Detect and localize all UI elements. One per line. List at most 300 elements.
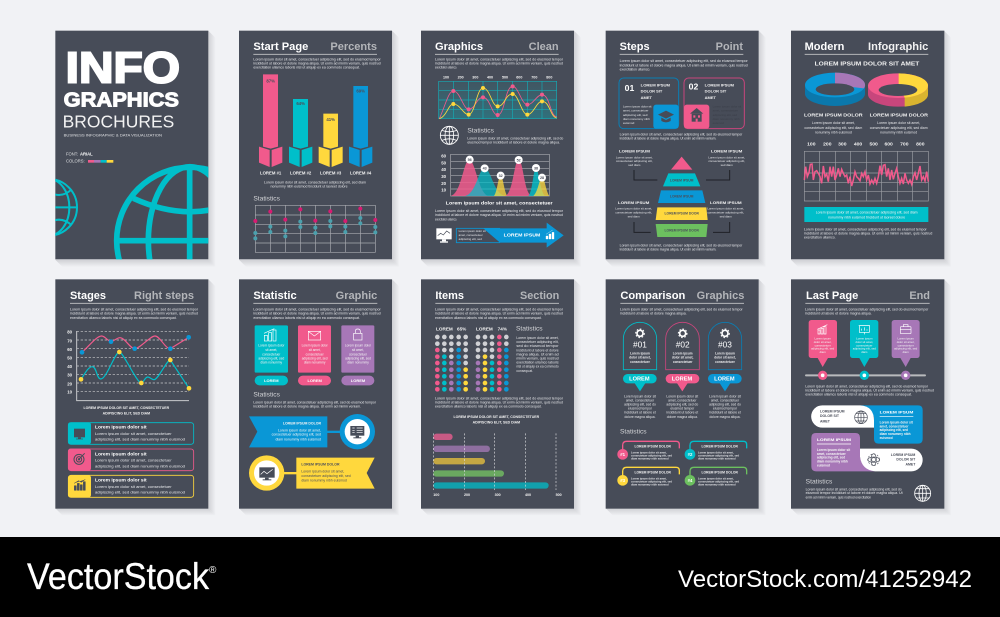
statistics heading: Statistics xyxy=(620,429,647,436)
callout: top left: consectetuer adipiscing elit, xyxy=(616,159,653,163)
footer text: enim ad minim veniam, quis nostrud exercitation xyxy=(806,495,871,499)
info block: purple: adipiscing elit, sed xyxy=(817,456,845,460)
horizontal bar chart: 100 xyxy=(433,493,439,497)
arch card 1: Lorem ipsum xyxy=(630,351,650,355)
line chart: 50 xyxy=(67,355,73,360)
axis labels: 700 xyxy=(531,76,537,80)
stat item 2: Lorem ipsum dolor sit amet, xyxy=(698,450,734,454)
intro text: Lorem ipsum dolor sit amet, consectetuer adipiscing elit, sed do eiusmod tempor xyxy=(620,308,743,312)
heading: Comparison xyxy=(620,290,686,302)
callout: top left: Lorem ipsum dolor sit amet, xyxy=(616,155,653,159)
area chart: 50 xyxy=(441,160,447,165)
icon: gear xyxy=(636,329,644,338)
axis labels xyxy=(443,76,552,80)
bar labels xyxy=(260,170,372,175)
stat item 3: LOREM IPSUM DOLOR xyxy=(634,471,671,475)
pill 1: LOREM xyxy=(264,378,279,383)
footer text xyxy=(620,244,743,252)
bar 2: 64% xyxy=(296,101,305,106)
paragraph: incididunt ut labore et dolore magna aliqua. Ut enim ad minim veniam. xyxy=(253,404,361,408)
column text 2: Lorem ipsum dolor sit xyxy=(666,394,698,398)
callout card 1 xyxy=(809,320,837,367)
footer text: eiusmod tempor incididunt ut labore et dolore magna aliqua. Ut xyxy=(806,491,904,495)
intro text: exercitation ullamco laboris nisi ut aliquip ex ea commodo consequat. xyxy=(253,66,360,70)
step 01: LOREM IPSUM xyxy=(641,82,671,87)
list item 1: adipiscing elit, sed diam nonummy nibh euismod xyxy=(95,438,185,442)
callout card 3: diam xyxy=(903,350,909,354)
ribbon: blue: Lorem ipsum dolor sit amet, xyxy=(278,428,321,432)
line chart: 20 xyxy=(67,381,73,386)
icon: globe xyxy=(915,485,931,501)
step 01: diam nonummy nibh xyxy=(623,117,650,121)
line chart: 30 xyxy=(67,372,73,377)
axis labels: 100 xyxy=(443,76,449,80)
donut chart pink xyxy=(868,73,928,107)
ribbon: blue: LOREM IPSUM DOLOR xyxy=(283,421,321,425)
statistics block: consectetuer adipiscing elit, xyxy=(516,340,559,344)
area chart: 32 xyxy=(499,174,503,178)
info block: blue: Lorem ipsum dolor sit xyxy=(880,420,914,424)
heading: Items xyxy=(435,290,464,302)
paragraph: incididunt ut labore et dolore magna aliqua. Ut enim ad minim veniam. xyxy=(620,136,716,140)
arch card 2 xyxy=(666,322,699,370)
info block: blue: diam nonummy nibh xyxy=(880,432,911,436)
donut label right xyxy=(870,112,928,135)
step 02: amet, consectetuer xyxy=(713,109,738,113)
line chart xyxy=(439,76,557,119)
donut label right: nonummy nibh euismod xyxy=(880,131,917,135)
donut label right: consectetuer adipiscing elit, sed diam xyxy=(870,126,928,130)
speech pill 3 xyxy=(708,374,742,391)
stat item 1: diam nonummy nibh euismod xyxy=(631,457,669,461)
footer text: Lorem ipsum dolor sit amet, consectetuer adipiscing elit, sed do xyxy=(806,487,902,491)
paragraph xyxy=(805,384,934,397)
heading: Steps xyxy=(620,41,650,53)
callout card 2: consectetuer xyxy=(856,343,872,347)
callout: top right: Lorem ipsum dolor sit amet, xyxy=(708,155,745,159)
step 02: DOLOR SIT xyxy=(705,89,727,94)
heading right: Right steps xyxy=(134,290,194,302)
info block: blue xyxy=(811,405,923,444)
stat item 1: LOREM IPSUM DOLOR xyxy=(634,445,671,449)
list item 3: Lorem ipsum dolor sit xyxy=(95,478,147,483)
stat item 2: #2 xyxy=(688,452,693,457)
step 01: adipiscing elit, sed xyxy=(623,113,648,117)
line chart: 80 xyxy=(67,330,73,335)
column text 3: dolore magna aliqua. xyxy=(709,415,741,419)
title: GRAPHICS: GRAPHICS xyxy=(64,90,179,112)
statistics block: Statistics xyxy=(467,128,495,135)
list item 2: Lorem ipsum dolor sit xyxy=(95,451,147,456)
step 02: Lorem ipsum dolor sit xyxy=(713,105,741,109)
area chart: 40 xyxy=(441,167,447,172)
noise line chart: 300 xyxy=(838,142,847,148)
panel: last page xyxy=(791,279,944,509)
icon: gear xyxy=(721,329,729,338)
column text 3: amet, consectetuer xyxy=(711,398,740,402)
stat item 4: LOREM IPSUM DOLOR xyxy=(701,471,738,475)
arrow banner: LOREM IPSUM xyxy=(504,233,540,239)
axis labels: 800 xyxy=(546,76,552,80)
line chart xyxy=(67,330,191,401)
stat item 2: diam nonummy nibh euismod xyxy=(698,457,736,461)
ribbon: blue: consectetuer adipiscing elit, sed xyxy=(272,433,321,437)
bar labels: LOREM #4 xyxy=(350,170,372,175)
list item 1: Lorem ipsum dolor sit xyxy=(95,425,147,430)
arch card 1: #01 xyxy=(633,340,647,350)
axis labels: 300 xyxy=(472,76,478,80)
info block: purple: LOREM IPSUM xyxy=(817,437,852,442)
brand wordmark: VectorStock xyxy=(27,556,209,597)
intro text: Lorem ipsum dolor sit amet, consectetuer adipiscing elit, sed do eiusmod tempor xyxy=(253,308,381,312)
card 3: diam nonummy xyxy=(347,361,369,365)
step 02: adipiscing elit, sed xyxy=(713,113,737,117)
image id url: VectorStock.com/41252942 xyxy=(678,566,972,593)
statistics heading: Statistics xyxy=(253,195,281,202)
info block: blue: adipiscing elit, sed xyxy=(880,428,908,432)
callout: bottom right: consectetuer adipiscing elit, xyxy=(707,210,744,214)
chart caption: ADIPISCING ELIT, SED DIAM xyxy=(473,421,520,425)
paragraph: incididunt ut labore et dolore magna aliqua. Ut enim ad minim veniam, quis nostrud xyxy=(435,213,563,217)
info block: blue: amet, consectetuer xyxy=(880,424,909,428)
area chart: 60 xyxy=(441,153,447,158)
intro text: incididunt ut labore et dolore magna aliqua. Ut enim ad minim veniam, quis nostrud xyxy=(253,312,381,316)
intro text: Lorem ipsum dolor sit amet, consectetuer adipiscing elit, sed do eiusmod tempor xyxy=(435,308,564,312)
statistics block xyxy=(467,128,563,145)
intro text xyxy=(253,57,381,70)
teal callout xyxy=(804,207,928,222)
callout: bottom right: Lorem ipsum dolor sit amet, xyxy=(707,207,744,211)
stat item 2: consectetuer adipiscing elit, sed xyxy=(698,453,739,457)
stat item 3: #3 xyxy=(620,478,626,483)
arch card 3 xyxy=(708,322,742,370)
horizontal bar chart: 500 xyxy=(556,493,562,497)
column text 3: eiusmod tempor xyxy=(713,407,738,411)
column text 2: adipiscing elit, sed do xyxy=(666,402,698,406)
intro text: exercitation ullamco laboris nisi ut aliquip ex ea commodo consequat. xyxy=(70,316,177,320)
icon: monitor chart xyxy=(74,429,85,439)
column text 2 xyxy=(666,394,698,419)
callout: top right: consectetuer adipiscing elit, xyxy=(708,159,745,163)
step 02 xyxy=(684,78,744,129)
statistics heading: Statistics xyxy=(253,392,281,399)
axis labels: 600 xyxy=(516,76,522,80)
paragraph: Lorem ipsum dolor sit amet, consectetuer adipiscing elit, sed do eiusmod tempor xyxy=(435,396,564,400)
icon: growth bars xyxy=(264,329,276,341)
list item 1: Lorem ipsum dolor sit amet, consectetuer xyxy=(95,432,172,436)
callout: bottom left xyxy=(615,200,652,232)
column text 3: Lorem ipsum dolor sit xyxy=(709,394,741,398)
card 1: consectetuer xyxy=(262,352,280,356)
intro text: Lorem ipsum dolor sit amet, consectetuer adipiscing elit, sed do eiusmod tempor xyxy=(620,59,748,63)
noise line chart: 500 xyxy=(870,142,878,148)
callout: bottom left: sed diam xyxy=(628,214,640,218)
panel: steps page xyxy=(606,31,759,259)
intro text: Lorem ipsum dolor sit amet, consectetuer adipiscing elit, sed do eiusmod tempor xyxy=(253,57,381,61)
column text 3: adipiscing elit, sed do xyxy=(709,402,741,406)
callout: bottom left: LOREM IPSUM xyxy=(618,200,650,205)
intro text: incididunt ut labore et dolore magna aliqua. Ut enim ad minim veniam, quis nostrud xyxy=(435,312,563,316)
card 3: adipiscing elit, sed xyxy=(345,356,371,360)
donut label right: Lorem ipsum dolor sit amet, xyxy=(877,121,920,125)
pyramid chart: LOREM IPSUM xyxy=(670,178,694,182)
arch card 2: #02 xyxy=(676,340,690,350)
font note: FONT: xyxy=(66,152,78,157)
column text 2: amet, consectetuer xyxy=(668,398,697,402)
teal callout: Lorem ipsum dolor sit amet, consectetuer adipiscing elit, sed diam xyxy=(816,211,918,215)
line chart: 40 xyxy=(67,364,73,369)
card 3: Lorem ipsum dolor xyxy=(345,344,371,348)
bar labels: LOREM #1 xyxy=(260,170,282,175)
arch card 2: consectetuer xyxy=(673,360,693,364)
list item 2: Lorem ipsum dolor sit amet, consectetuer xyxy=(95,459,172,463)
pill 2 xyxy=(298,376,331,385)
horizontal bar chart: 300 xyxy=(495,493,501,497)
heading: Last Page xyxy=(806,290,858,302)
paragraph: Lorem ipsum dolor sit amet, consectetuer adipiscing elit, sed do eiusmod tempor xyxy=(435,209,564,213)
column text 1: eiusmod tempor xyxy=(628,407,653,411)
info block: purple: euismod xyxy=(817,464,830,468)
icon: large globe xyxy=(114,164,208,260)
intro text xyxy=(70,308,199,320)
icon: padlock xyxy=(354,329,362,340)
info block: blue: DOLOR SIT xyxy=(820,414,840,418)
panel: statistic page xyxy=(239,279,392,509)
subheading: LOREM IPSUM DOLOR SIT AMET xyxy=(815,61,920,67)
column text 2: incididunt ut labore et xyxy=(667,411,698,415)
noise line chart: 400 xyxy=(854,142,862,148)
statistics block: nisi ut aliquip ex ea commodo xyxy=(516,365,559,369)
pill 3: LOREM xyxy=(351,378,366,383)
stat item 4: consectetuer adipiscing elit, sed xyxy=(698,479,739,483)
paragraph: incididunt ut labore et dolore magna aliqua. Ut enim ad minim veniam, quis nostrud xyxy=(435,400,563,404)
card 3: sit amet, xyxy=(352,348,364,352)
statistics block xyxy=(516,326,560,373)
column text 1: dolore magna aliqua. xyxy=(624,415,656,419)
dot matrix right: LOREM xyxy=(476,327,493,332)
column text 2: dolore magna aliqua. xyxy=(667,415,698,419)
icon: globe xyxy=(440,126,458,144)
stat item 1: consectetuer adipiscing elit, sed xyxy=(631,453,672,457)
card 1: sit amet, xyxy=(265,348,277,352)
heading right: Graphics xyxy=(697,290,744,302)
callout card 2: Lorem ipsum xyxy=(856,336,873,340)
arch card 1: dolor sit amet, xyxy=(629,355,651,359)
stat item 1: #1 xyxy=(620,452,626,457)
column text 1: amet, consectetuer xyxy=(626,398,655,402)
list item 2: adipiscing elit, sed diam nonummy nibh euismod xyxy=(95,464,185,468)
paragraph: incididunt ut labore et dolore magna aliqua. Ut enim ad minim veniam, quis nostrud xyxy=(805,388,934,392)
card 3 xyxy=(341,325,374,373)
chart caption xyxy=(84,406,170,416)
ribbon: yellow xyxy=(249,455,375,491)
callout: top right xyxy=(706,149,745,180)
paragraph xyxy=(620,132,743,140)
icon: envelope xyxy=(308,331,321,340)
step 01: amet, consectetuer xyxy=(623,109,648,113)
noise line chart: 100 xyxy=(807,142,816,148)
arch card 3: consectetuer xyxy=(715,360,736,364)
dot chart xyxy=(253,205,377,252)
card 1 xyxy=(255,325,288,373)
info block: purple: amet, consectetuer xyxy=(817,452,847,456)
dot matrix right xyxy=(476,327,509,392)
font note: ARIAL xyxy=(80,152,93,157)
paragraph xyxy=(804,227,932,240)
axis labels: 500 xyxy=(502,76,508,80)
donut label left: Lorem ipsum dolor sit amet, xyxy=(812,121,855,125)
ribbon: blue: diam nonummy nibh euismod xyxy=(275,437,321,441)
intro text xyxy=(435,308,564,320)
intro text: Lorem ipsum dolor sit amet, consectetuer adipiscing elit, sed do eiusmod tempor xyxy=(70,308,199,312)
area chart: 56 xyxy=(468,158,472,162)
title: BROCHURES: BROCHURES xyxy=(63,112,174,132)
heading right: Graphic xyxy=(336,290,377,302)
intro text: incididunt ut labore et dolore magna aliqua. Ut enim ad minim veniam, quis nostrud xyxy=(70,312,198,316)
callout: top left: LOREM IPSUM xyxy=(619,149,651,154)
intro text: incididunt ut labore et dolore magna aliqua. xyxy=(620,312,687,316)
pyramid chart: LOREM IPSUM xyxy=(670,195,694,199)
column text 1: incididunt ut labore et xyxy=(624,411,656,415)
statistics block: incididunt ut labore et dolore xyxy=(516,348,559,352)
icon: atom gear xyxy=(868,454,880,466)
callout: top right: LOREM IPSUM xyxy=(711,149,743,154)
pill 2: LOREM xyxy=(307,378,323,383)
statistics block: eiusmod tempor incididunt ut labore et dolore magna aliqua. xyxy=(467,141,560,145)
stat item 4 xyxy=(685,467,747,487)
line chart: 60 xyxy=(67,347,73,352)
panel: comparison page xyxy=(606,279,759,509)
arch card 2: Lorem ipsum xyxy=(673,351,693,355)
caption xyxy=(264,180,366,189)
paragraph: exercitation ullamco. xyxy=(804,236,836,240)
speech pill 2 xyxy=(666,374,699,391)
callout: top right: sed diam xyxy=(721,163,733,167)
donut label left xyxy=(804,112,863,135)
step 01: Lorem ipsum dolor sit xyxy=(623,105,652,109)
step 02: LOREM IPSUM xyxy=(705,82,735,87)
speech pill 1: LOREM xyxy=(629,377,650,383)
callout card 3: adipiscing elit, sed xyxy=(894,347,918,351)
icon: bar chart xyxy=(74,479,85,490)
ribbon: yellow: LOREM IPSUM DOLOR xyxy=(301,462,340,466)
dot matrix right: 74% xyxy=(498,327,508,332)
donut chart blue xyxy=(805,73,865,106)
stat item 4: #4 xyxy=(688,478,693,483)
intro text xyxy=(620,59,748,72)
bar 4: 69% xyxy=(356,88,365,93)
callout card 1: adipiscing elit, sed xyxy=(811,347,835,351)
statistics block: Lorem ipsum dolor sit amet, xyxy=(516,336,559,340)
step 01: DOLOR SIT xyxy=(641,89,663,94)
info block: purple: Lorem ipsum dolor sit xyxy=(817,448,851,452)
dot matrix left: 65% xyxy=(457,327,467,332)
footer text: Lorem ipsum dolor sit amet, consectetuer adipiscing elit, sed do eiusmod tempor xyxy=(620,244,743,248)
heading: Start Page xyxy=(253,41,308,53)
statistics block: exercitation ullamco laboris xyxy=(516,361,559,365)
timeline xyxy=(806,371,925,380)
column text 3 xyxy=(709,394,741,419)
paragraph: Lorem ipsum dolor sit amet, consectetuer adipiscing elit, sed do eiusmod tempor xyxy=(804,227,927,231)
card 1: adipiscing elit, sed xyxy=(258,356,284,360)
stat item 2 xyxy=(685,441,747,461)
list item 1 xyxy=(68,422,194,444)
speech pill 2: LOREM xyxy=(672,377,692,383)
ribbon: yellow: diam nonummy nibh euismod xyxy=(301,479,347,483)
arrow banner xyxy=(456,223,564,248)
icon: small globe xyxy=(55,178,78,236)
paragraph: exercitation ullamco. xyxy=(435,217,457,221)
intro text xyxy=(253,308,381,320)
bar 1: 87% xyxy=(266,78,275,83)
chart caption: LOREM IPSUM DOLOR SIT AMET, CONSECTETUER xyxy=(84,406,170,410)
icon: list monitor xyxy=(350,426,364,438)
callout card 1: consectetuer xyxy=(815,343,831,347)
paragraph: exercitation ullamco laboris nisi ut aliquip ex ea commodo consequat. xyxy=(435,405,542,409)
heading right: Point xyxy=(716,41,743,53)
stat item 3 xyxy=(617,467,679,487)
stat item 1: Lorem ipsum dolor sit amet, xyxy=(631,450,667,454)
footer bar xyxy=(0,537,1000,617)
subtitle: BUSINESS INFOGRAPHIC & DATA VISUALIZATION xyxy=(64,132,162,137)
area chart: 30 xyxy=(441,174,447,179)
teal callout: nonummy nibh euismod tincidunt ut laoreet dolore xyxy=(828,215,905,219)
pill 3 xyxy=(341,376,374,385)
column text 1: Lorem ipsum dolor sit xyxy=(624,394,656,398)
arrow banner: Lorem ipsum dolor sit xyxy=(459,229,486,233)
intro text: Lorem ipsum dolor sit amet, consectetuer adipiscing elit, sed do eiusmod tempor xyxy=(435,57,564,61)
intro text xyxy=(620,308,743,316)
icon: chart monitor xyxy=(259,467,275,480)
speech pill 3: LOREM xyxy=(714,377,735,383)
step 01: 01 xyxy=(625,83,634,93)
column text 2: eiusmod tempor xyxy=(670,407,695,411)
card 2: Lorem ipsum dolor xyxy=(302,344,328,348)
panel: graphics page xyxy=(421,31,574,259)
callout: bottom right xyxy=(707,200,744,232)
noise line chart: 600 xyxy=(885,142,893,148)
column text 1 xyxy=(624,394,656,419)
bar labels: LOREM #2 xyxy=(290,170,312,175)
registered mark: ® xyxy=(209,565,217,576)
intro text: incididunt ut labore et dolore magna aliqua. Ut enim ad minim veniam, quis nostrud xyxy=(435,61,563,65)
step 02: euismod xyxy=(713,121,724,125)
paragraph: exercitation ullamco laboris nisi ut aliquip ex ea commodo consequat. xyxy=(805,393,912,397)
chart caption: Lorem ipsum dolor sit amet, consectetuer xyxy=(446,201,553,207)
heading right: Clean xyxy=(529,41,559,53)
icon: graduation cap xyxy=(658,111,674,122)
line chart: 10 xyxy=(67,390,73,395)
icon: house xyxy=(690,108,703,122)
info block: purple xyxy=(811,433,923,471)
stat item 2: LOREM IPSUM DOLOR xyxy=(701,445,738,449)
info block: blue: LOREM IPSUM xyxy=(880,409,914,414)
panel: start page xyxy=(239,31,392,259)
noise line chart: 200 xyxy=(823,142,832,148)
stat item 3: Lorem ipsum dolor sit amet, xyxy=(631,476,667,480)
paragraph xyxy=(253,400,377,408)
column text 3: incididunt ut labore et xyxy=(709,411,741,415)
footer text xyxy=(806,487,904,499)
arch card 3: dolor sit amet, xyxy=(714,355,736,359)
icon: monitor xyxy=(436,228,452,243)
icon: globe xyxy=(855,411,867,424)
intro text: incididunt ut labore et dolore magna aliqua. Ut enim ad minim veniam, quis nostrud xyxy=(253,61,381,65)
paragraph: incididunt ut labore et dolore magna aliqua. Ut enim ad minim veniam, quis nostrud xyxy=(804,231,932,235)
icon: presentation board xyxy=(859,326,870,334)
icon: bars xyxy=(817,325,827,334)
stat item 3: diam nonummy nibh euismod xyxy=(631,483,669,487)
